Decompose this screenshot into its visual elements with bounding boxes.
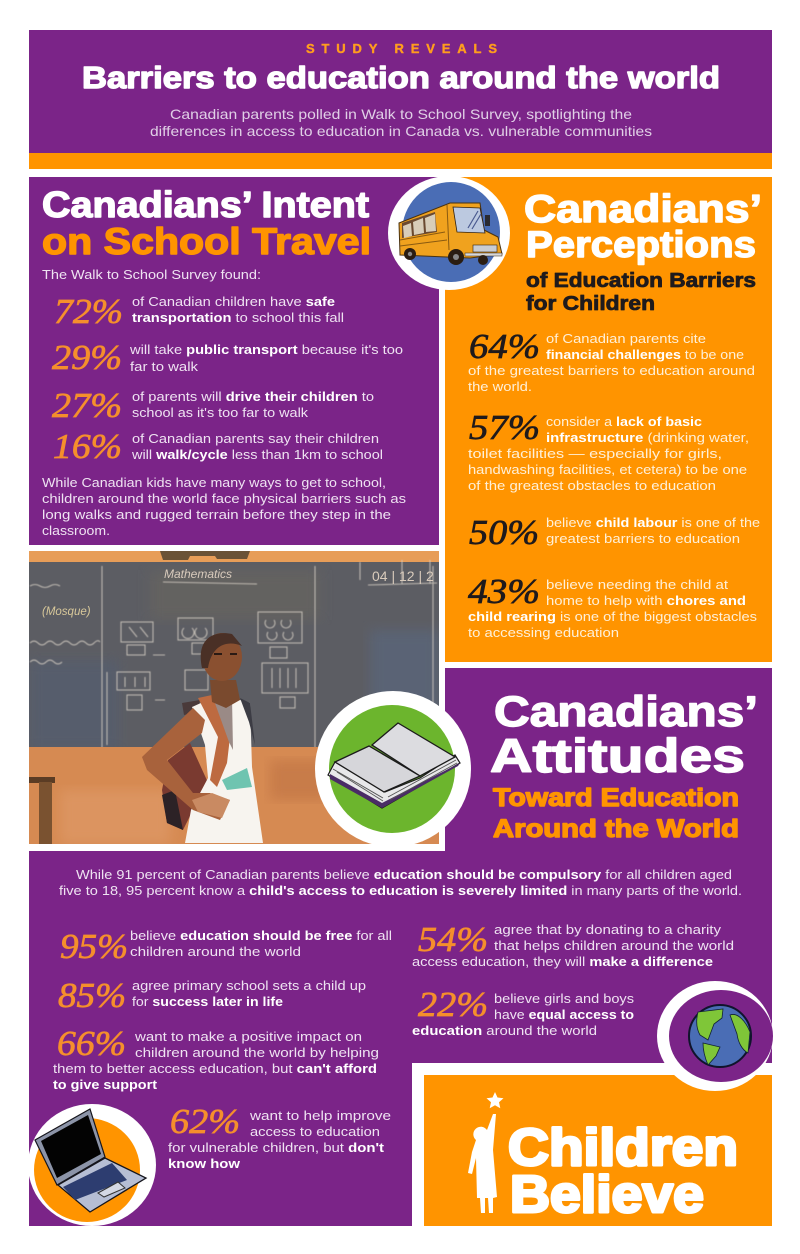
belt — [222, 768, 252, 790]
stat: 54% — [412, 920, 734, 969]
stat: 72%: 72% — [54, 292, 123, 331]
stat: 43%: to accessing education — [468, 625, 619, 640]
chalk drawings — [30, 560, 437, 748]
stat: 85%: agree primary school sets a child up — [132, 978, 366, 993]
panel: logo — [424, 1075, 772, 1226]
stat: 85% — [58, 976, 366, 1015]
panel: canadians' perceptions — [445, 177, 772, 662]
stat: 22% — [412, 985, 634, 1038]
stat: 27%: of parents will drive their children to — [132, 389, 374, 404]
dress — [185, 698, 263, 843]
stat: 22%: have equal access to — [494, 1007, 634, 1022]
icon: child reaching — [468, 1114, 497, 1213]
stat: 16%: 16% — [53, 427, 122, 466]
girl's arm — [142, 708, 230, 820]
stat: 43% — [468, 572, 757, 640]
logo wordmark — [508, 1119, 738, 1224]
text block: physical barriers — [42, 475, 406, 538]
subtitle: Canadian parents polled in Walk to School Survey, spotlighting the — [170, 106, 632, 122]
heading: perceptions: Canadians’ — [524, 188, 762, 231]
panel: canadians' intent — [29, 177, 439, 545]
stat: 64%: the world. — [468, 379, 532, 394]
subtitle: differences in access to education in Canada vs. vulnerable communities — [150, 123, 652, 139]
stat: 54%: access education, they will make a difference — [412, 954, 713, 969]
panel: canadians' attitudes — [29, 668, 772, 1226]
wall top band — [29, 551, 439, 562]
stat: 43%: believe needing the child at — [546, 577, 728, 592]
heading: attitudes: Around the World — [493, 815, 739, 843]
stat: 57%: of the greatest obstacles to education — [468, 478, 716, 493]
stat: 95% — [60, 927, 392, 966]
stat: 62% — [168, 1102, 391, 1171]
stat: 27%: 27% — [52, 386, 122, 425]
stat: 54%: agree that by donating to a charity — [494, 922, 721, 937]
stat: 72% — [54, 292, 344, 331]
stat: 64%: financial challenges to be one — [546, 347, 744, 362]
stat: 66%: children around the world by helping — [135, 1045, 379, 1060]
icon: laptop — [28, 1104, 156, 1226]
stat: 57%: handwashing facilities, et cetera) to be one — [468, 462, 747, 477]
stat: 54%: 54% — [418, 920, 488, 959]
desk — [29, 777, 55, 844]
lead-in text: The Walk to School Survey found: — [42, 267, 261, 282]
stat: 16%: of Canadian parents say their children — [132, 431, 379, 446]
stat: 50%: greatest barriers to education — [546, 531, 740, 546]
stat: 22%: believe girls and boys — [494, 991, 634, 1006]
photo: girl at blackboard — [29, 551, 439, 844]
icon: star — [486, 1092, 504, 1108]
stat: 50%: 50% — [469, 513, 539, 552]
laptop screen — [35, 1109, 105, 1185]
chalk writing: Mathematics — [164, 567, 232, 581]
stat: 27% — [52, 386, 374, 425]
stat: 64%: 64% — [469, 327, 540, 366]
text block: physical barriers: While Canadian kids have many ways to get to school, — [42, 475, 386, 490]
heading: intent — [42, 184, 371, 262]
stat: 62%: access to education — [250, 1124, 380, 1139]
stat: 66%: them to better access education, but can't afford — [53, 1061, 377, 1076]
intro text: While 91 percent of Canadian parents believe education should be compulsory for all children aged — [76, 867, 732, 882]
intro text — [59, 867, 742, 898]
heading: attitudes: Attitudes — [490, 729, 745, 782]
stat: 66%: want to make a positive impact on — [134, 1029, 362, 1044]
stat: 43%: child rearing is one of the biggest obstacles — [468, 609, 757, 624]
stat: 50% — [469, 513, 760, 552]
book — [328, 723, 460, 808]
stat: 62%: know how — [168, 1156, 241, 1171]
stat: 22%: 22% — [418, 985, 488, 1024]
stat: 72%: transportation to school this fall — [132, 310, 344, 325]
icon: school bus — [388, 176, 510, 290]
heading: attitudes — [490, 688, 758, 843]
stat: 54%: that helps children around the world — [494, 938, 734, 953]
text block: physical barriers: classroom. — [42, 523, 110, 538]
stat: 64%: of Canadian parents cite — [546, 331, 706, 346]
stat: 43%: home to help with chores and — [546, 593, 746, 608]
stat: 62%: for vulnerable children, but don't — [168, 1140, 385, 1155]
heading: perceptions: Perceptions — [526, 224, 756, 265]
stat: 85%: 85% — [58, 976, 126, 1015]
stat: 66%: 66% — [57, 1024, 126, 1063]
subtitle — [150, 106, 652, 139]
heading: attitudes: Canadians’ — [494, 688, 758, 736]
stat: 62%: 62% — [170, 1102, 240, 1141]
stat: 62%: want to help improve — [249, 1108, 391, 1123]
laptop base — [58, 1158, 146, 1212]
stat: 95%: children around the world — [130, 944, 301, 959]
text block: physical barriers: children around the world face physical barriers such as — [42, 491, 406, 506]
header panel — [29, 30, 772, 169]
stat: 85%: for success later in life — [132, 994, 283, 1009]
stat: 95%: 95% — [60, 927, 128, 966]
stat: 29%: will take public transport because it's too — [129, 342, 403, 357]
stat: 57%: infrastructure (drinking water, — [546, 430, 749, 445]
heading: perceptions: of Education Barriers — [526, 270, 756, 292]
stat: 43%: 43% — [468, 572, 540, 611]
stat: 50%: believe child labour is one of the — [546, 515, 760, 530]
chalk writing: (Mosque) — [42, 606, 91, 618]
eyebrow: study reveals: STUDY REVEALS — [306, 41, 497, 56]
stat: 29%: far to walk — [130, 359, 198, 374]
stat: 57% — [468, 408, 749, 493]
stat: 64%: of the greatest barriers to education around — [468, 363, 755, 378]
stat: 66% — [53, 1024, 379, 1092]
neck and head — [210, 680, 240, 708]
blackboard — [29, 562, 439, 748]
stat: 16%: will walk/cycle less than 1km to school — [131, 447, 383, 462]
icon: globe — [657, 981, 773, 1091]
stat: 29%: 29% — [52, 338, 122, 377]
heading: perceptions — [524, 188, 762, 315]
stat: 29% — [52, 338, 403, 377]
logo wordmark: Believe — [510, 1166, 704, 1224]
heading: attitudes: Toward Education — [493, 784, 739, 812]
intro text: five to 18, 95 percent know a child's access to education is severely limited in many parts of the world. — [59, 883, 742, 898]
logo wordmark: Children — [508, 1119, 738, 1177]
stat: 57%: toilet facilities — especially for girls, — [468, 446, 722, 461]
lower wall — [29, 747, 439, 844]
chalk writing: 04 | 12 | 2 — [372, 568, 434, 584]
heading: perceptions: for Children — [526, 293, 655, 315]
strap — [198, 695, 230, 787]
icon: open book — [315, 691, 471, 847]
chalk writing — [42, 567, 434, 618]
backpack — [162, 743, 210, 830]
title: Barriers to education around the world — [82, 60, 720, 95]
stat: 95%: believe education should be free for all — [130, 928, 392, 943]
stat: 27%: school as it's too far to walk — [132, 405, 308, 420]
stat: 64% — [468, 327, 755, 394]
stat: 22%: education around the world — [412, 1023, 597, 1038]
heading: intent: Canadians’ Intent — [42, 184, 369, 225]
text block: physical barriers: long walks and rugged terrain before they step in the — [42, 507, 391, 522]
stat: 16% — [53, 427, 383, 466]
stat: 57%: 57% — [469, 408, 540, 447]
stat: 66%: to give support — [53, 1077, 158, 1092]
stat: 57%: consider a lack of basic — [546, 414, 702, 429]
stat: 72%: of Canadian children have safe — [132, 294, 335, 309]
heading: intent: on School Travel — [42, 221, 371, 262]
